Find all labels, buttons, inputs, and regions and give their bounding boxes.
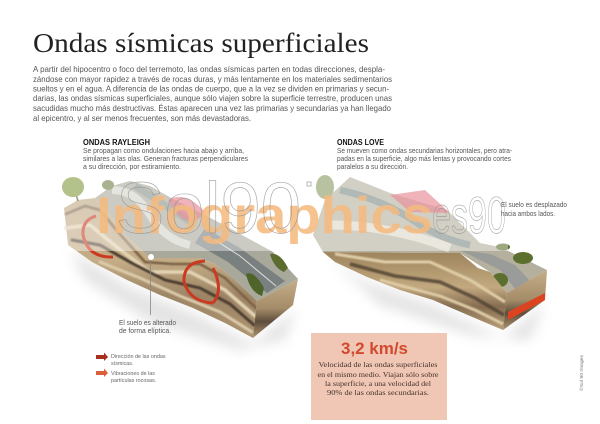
callout: suelo desplazado: El suelo es desplazado: [501, 200, 567, 209]
right rock face: [503, 270, 547, 330]
callout line and dot: [148, 254, 154, 315]
icon: vibration arrow: [96, 368, 108, 377]
legend text: direction: Dirección de las ondas: [111, 354, 166, 360]
watermark: es90: [432, 187, 506, 245]
speed description: [318, 360, 439, 397]
legend text: direction: sísmicas.: [111, 361, 133, 367]
legend: [96, 352, 166, 384]
watermark: Infographics: [96, 187, 433, 245]
front rock face: [64, 198, 257, 338]
heading and text: ondas Love: paralelos a su dirección.: [337, 162, 408, 171]
heading and text: ondas Rayleigh: [83, 138, 248, 171]
title: Ondas sísmicas superficiales: [33, 28, 369, 58]
heading and text: ondas Love: ONDAS LOVE: [337, 138, 384, 147]
ground surface: [95, 181, 298, 301]
legend text: vibration: partículas rocosas.: [111, 378, 156, 384]
rock strata: [66, 206, 256, 332]
callout: suelo alterado: de forma elíptica.: [119, 326, 171, 335]
icon: red elliptical arrow left: [83, 216, 113, 257]
terrain block: Love waves: [313, 175, 547, 340]
heading and text: ondas Rayleigh: Se propagan como ondulaciones hacia abajo y arriba,: [83, 146, 244, 155]
heading and text: ondas Rayleigh: a su dirección, por estiramiento.: [83, 162, 181, 171]
front rock face: [323, 252, 507, 330]
intro text block: A partir del hipocentro o foco del terremoto, las ondas sísmicas parten en todas direcciones, despla-: [33, 64, 385, 74]
icon: direction arrow: [96, 352, 108, 361]
intro text block: sacudidas mucho más destructivas. Éstas aparecen una vez las primarias y secundarias ya han llegado: [33, 103, 391, 113]
heading and text: ondas Love: Se mueven como ondas secundarias horizontales, pero atra-: [337, 146, 513, 155]
ground surface: [313, 177, 547, 293]
vegetation on the surface: [432, 244, 533, 287]
icon: tree: [62, 177, 84, 201]
surface pink patch: [168, 197, 205, 222]
right rock face: [253, 279, 298, 338]
icon: faded tree: [316, 175, 334, 199]
intro text block: sueltos y en el agua. A diferencia de las ondas de cuerpo, que a la vez se dividen en primarias y secun-: [33, 84, 389, 94]
callout: suelo alterado: [119, 318, 176, 335]
callout: suelo alterado: El suelo es alterado: [119, 318, 176, 327]
speed description: 90% de las ondas secundarias.: [327, 388, 429, 397]
heading and text: ondas Rayleigh: ONDAS RAYLEIGH: [83, 138, 150, 147]
watermark band: [58, 172, 508, 251]
callout: suelo desplazado: hacia ambos lados.: [501, 209, 555, 218]
intro text block: [33, 64, 392, 123]
vegetation patches: [496, 244, 510, 250]
icon: bush: [102, 180, 114, 190]
block shadow: [330, 258, 545, 340]
speed description: Velocidad de las ondas superficiales: [318, 360, 438, 369]
road: [460, 250, 532, 290]
vegetation on the surface: [270, 254, 288, 272]
block shadow: [70, 250, 296, 350]
intro text block: al epicentro, y al ser menos frecuentes, son más devastadoras.: [33, 113, 251, 123]
image credit: ©Sol 90 Images: [578, 354, 584, 391]
surface contour bands: [112, 190, 190, 245]
icon: red elliptical arrow right: [184, 261, 218, 303]
terrain block: Rayleigh waves: [62, 177, 298, 350]
intro text block: zándose con mayor rapidez a través de rocas duras, y más lentamente en los materiales sedimentarios: [33, 74, 392, 84]
surface contour bands: [340, 190, 470, 245]
speed description: en el mismo medio. Viajan sólo sobre: [318, 370, 439, 379]
heading and text: ondas Rayleigh: similares a las olas. Generan fracturas perpendiculares: [83, 154, 248, 163]
icon: red shear band: [508, 293, 545, 320]
rock strata: [335, 254, 505, 324]
heading and text: ondas Love: [337, 138, 513, 171]
watermark: Sol90: [116, 169, 301, 249]
intro text block: darias, las ondas sísmicas superficiales, aunque sólo viajen sobre la superficie terrestre, producen unas: [33, 93, 392, 103]
legend text: vibration: Vibraciones de las: [111, 371, 155, 377]
heading and text: ondas Love: padas en la superficie, algo más lentas y provocando cortes: [337, 154, 511, 163]
callout: suelo desplazado: [501, 200, 567, 218]
road: [195, 228, 285, 293]
speed description: la superficie, a una velocidad del: [325, 379, 432, 388]
panel: speed callout: [311, 333, 447, 420]
surface pink patch: [390, 190, 450, 213]
watermark: [96, 169, 506, 249]
speed figure: 3,2 km/s: [341, 339, 408, 358]
